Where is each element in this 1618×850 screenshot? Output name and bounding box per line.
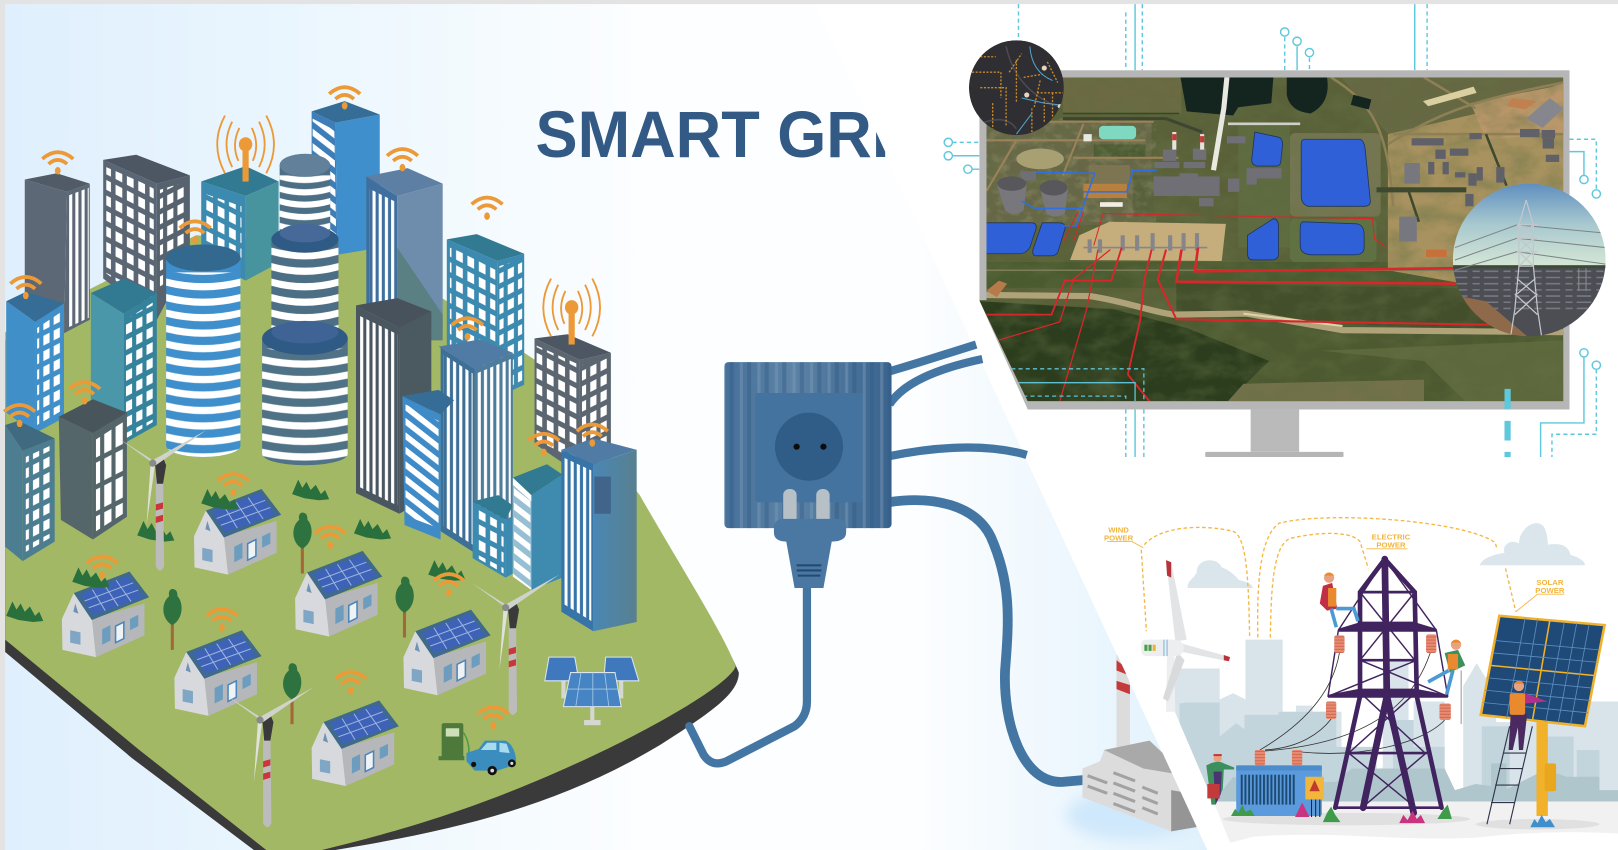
wifi 4 <box>472 198 503 220</box>
cylinder tower: top <box>280 154 330 237</box>
red transmission lines <box>986 211 1499 401</box>
ground <box>1214 802 1618 843</box>
power plant buildings <box>1021 136 1282 206</box>
inset: dark network map <box>969 40 1064 135</box>
building: small blue striped block <box>402 390 454 540</box>
building: blue left tower <box>6 292 64 433</box>
panel: monitor with aerial map <box>979 70 1570 410</box>
socket face <box>775 413 843 481</box>
antenna 2 <box>543 279 600 345</box>
aerial map <box>979 77 1563 401</box>
wires <box>1260 653 1445 753</box>
houses with solar roofs <box>62 489 491 786</box>
island base edge <box>5 243 739 850</box>
turbine 1 <box>119 430 206 570</box>
socket plate <box>755 393 863 502</box>
building: dark tower with translucent top <box>356 298 431 514</box>
socket block and plug <box>724 362 892 588</box>
house 6 <box>312 700 399 786</box>
cable to middle panel <box>885 447 1027 457</box>
power cables <box>689 345 1086 782</box>
label: solar power: SOLAR <box>1536 578 1564 587</box>
panel: smart city island <box>4 87 739 850</box>
building: tall blue tower <box>312 101 380 255</box>
house 2 <box>62 571 149 657</box>
field patches <box>979 77 1563 401</box>
antenna 1 <box>217 116 274 182</box>
lower right lines <box>1508 349 1600 457</box>
wifi 15 <box>206 609 237 631</box>
coal ponds <box>1180 77 1371 116</box>
bush 2 <box>292 480 329 500</box>
plants <box>1231 803 1555 827</box>
label: wind power <box>1104 525 1143 548</box>
house 4 <box>403 610 491 695</box>
label: solar power: POWER <box>1535 586 1565 595</box>
wifi 8 <box>4 405 35 427</box>
wind turbine <box>1141 560 1230 712</box>
wifi 10 <box>528 434 559 456</box>
tan clearings <box>986 134 1130 297</box>
turbine 3 <box>226 687 314 827</box>
building: small far-left tower <box>5 421 55 561</box>
solar panel <box>1481 616 1605 816</box>
plug body <box>774 519 846 588</box>
clouds <box>1188 523 1585 588</box>
island lawn <box>5 235 736 850</box>
plug pins <box>783 489 797 524</box>
label: wind power: POWER <box>1104 534 1134 543</box>
tree 1 <box>293 513 312 574</box>
cylinder tower: base <box>262 321 348 465</box>
lower left lines <box>1126 410 1144 457</box>
circuit overlays on map <box>1011 369 1144 401</box>
right lines <box>1570 139 1600 198</box>
monitor frame <box>979 70 1570 410</box>
house 3 <box>295 551 382 636</box>
building: teal low block <box>473 495 513 578</box>
turbine 2 <box>472 575 559 715</box>
EV charging station and car <box>439 723 516 775</box>
wifi 1 <box>42 152 73 174</box>
water ponds <box>979 132 1370 260</box>
worker on tower left <box>1320 573 1358 627</box>
wifi 14 <box>87 557 118 579</box>
transmission tower <box>1328 559 1448 813</box>
solar array <box>545 657 639 725</box>
trees and bushes <box>6 480 465 724</box>
industrial buildings <box>1399 129 1559 241</box>
wifi 7 <box>69 382 100 404</box>
ladder <box>1487 726 1532 824</box>
blue utility lines <box>1022 170 1157 226</box>
wifi 11 <box>577 424 608 447</box>
ground shadows <box>1223 813 1599 829</box>
factory building <box>1082 742 1189 832</box>
building: grey windowed tower <box>103 155 190 320</box>
wifi 17 <box>335 672 366 694</box>
conveyor <box>1214 77 1227 170</box>
wifi 18 <box>478 707 509 729</box>
monitor stand <box>1205 410 1344 457</box>
label: solar power <box>1516 578 1565 612</box>
wifi 9 <box>452 318 483 341</box>
building: striped teal block <box>513 464 562 590</box>
building: grey windowed rear tower <box>535 334 611 475</box>
wifi 5 <box>180 221 211 244</box>
inset: transmission tower photo <box>1453 184 1606 337</box>
bush 4 <box>72 567 109 588</box>
house 1 <box>194 489 281 575</box>
label: electric power: ELECTRIC <box>1372 533 1411 542</box>
wifi 6 <box>10 277 41 299</box>
wifi signal icons <box>4 87 608 729</box>
cable to island <box>689 578 807 763</box>
cooling towers <box>997 176 1068 217</box>
city buildings <box>5 101 637 631</box>
tree 4 <box>283 663 301 724</box>
right cloud <box>1480 523 1585 565</box>
wind turbines on island <box>119 430 559 827</box>
wifi 16 <box>433 574 464 596</box>
left cloud <box>1188 560 1253 588</box>
wifi 12 <box>218 474 249 496</box>
circuit lines around monitor <box>944 4 1600 457</box>
substation pad <box>1070 222 1226 261</box>
building: teal antenna tower <box>201 166 279 281</box>
socket block <box>724 362 892 528</box>
building: blue glass tower <box>366 168 443 340</box>
worker at transformer <box>1206 754 1234 805</box>
left lines <box>944 138 979 173</box>
top lines <box>1018 4 1427 70</box>
chimneys <box>1174 132 1202 150</box>
road bands <box>979 77 1563 332</box>
label: electric power <box>1366 533 1411 550</box>
wifi 2 <box>329 87 360 109</box>
building: teal windowed block <box>447 234 524 397</box>
label: wind power: WIND <box>1108 525 1129 534</box>
label: electric power: POWER <box>1376 541 1406 550</box>
cylinder tower: middle <box>271 224 338 340</box>
bush 1 <box>201 489 238 510</box>
factory <box>1066 655 1207 840</box>
factory chimney <box>1117 655 1130 753</box>
cylinder tower: blue striped <box>166 244 240 457</box>
title: SMART GRID <box>536 97 935 171</box>
wifi 13 <box>315 527 346 549</box>
red outline feeder <box>1094 214 1386 247</box>
factory glow <box>1066 790 1194 840</box>
building: striped centre tower <box>439 339 513 553</box>
antenna towers <box>217 116 600 345</box>
panel: energy illustration <box>1104 518 1618 843</box>
bush 5 <box>6 601 43 622</box>
dashed energy connectors <box>1141 518 1516 638</box>
cables to monitor <box>889 345 976 371</box>
tree 2 <box>163 589 182 650</box>
bush 3 <box>354 519 391 540</box>
building: dark tower with vertical stripes <box>25 173 90 333</box>
tree 3 <box>396 577 414 638</box>
wifi 3 <box>387 149 418 171</box>
teal pond <box>1099 126 1136 139</box>
bush 7 <box>428 560 465 581</box>
transformer <box>1236 765 1324 817</box>
worker on ladder <box>1509 681 1548 750</box>
building: dark left-front tower <box>59 399 127 540</box>
worker on tower right <box>1428 640 1465 724</box>
insulators <box>1255 634 1451 765</box>
cable to factory <box>887 500 1086 782</box>
bush 6 <box>137 521 174 542</box>
house 5 <box>174 630 262 716</box>
building: teal front-left tower <box>91 279 157 444</box>
building: large blue corner tower <box>561 438 637 631</box>
city skyline <box>1173 640 1618 802</box>
